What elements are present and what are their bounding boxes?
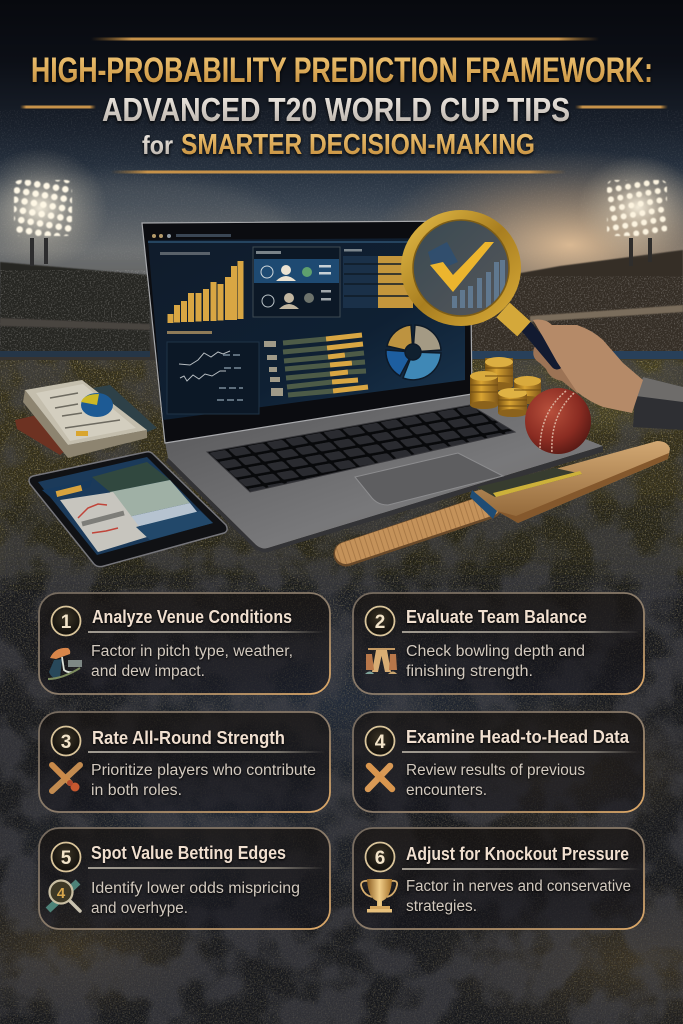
floodlight left [0, 148, 108, 268]
heading: Adjust for Knockout Pressure [406, 844, 629, 864]
number badge 6: 6 [375, 848, 385, 869]
number badge 5 [52, 842, 80, 872]
number badge 6 [366, 842, 394, 872]
icon: balance scale with cricket kit [365, 648, 397, 674]
trackpad [355, 453, 503, 505]
number badge 4 [366, 726, 394, 756]
description: Check bowling depth and [406, 643, 585, 660]
title block: for [142, 130, 173, 160]
number badge 1 [52, 606, 80, 636]
stadium stands: right [470, 250, 683, 359]
description: strategies. [406, 898, 477, 915]
bar chart [168, 261, 244, 323]
icon: trophy [361, 879, 397, 912]
laptop screen lid [142, 221, 472, 443]
card 2: evaluate team balance [353, 593, 644, 694]
number badge 3 [52, 726, 80, 756]
icon: venue lamp and stadium [48, 648, 82, 679]
gold coin stacks [470, 357, 541, 417]
palm and thumb [533, 320, 643, 413]
stacked rows panel [343, 249, 413, 308]
magnifier head [401, 210, 521, 326]
line chart panel [167, 331, 259, 414]
horizontal bars panel [264, 335, 368, 396]
description: Factor in pitch type, weather, [91, 643, 293, 660]
magnifier handle [503, 310, 557, 363]
cricket ball [525, 388, 591, 454]
pie chart [386, 325, 441, 380]
books with report [15, 380, 157, 458]
heading: Spot Value Betting Edges [91, 843, 286, 863]
title block: SMARTER DECISION-MAKING [181, 129, 535, 161]
card 4: examine head-to-head data [353, 712, 644, 812]
curled fingers [533, 342, 578, 394]
stadium stands: left [0, 262, 150, 357]
description: in both roles. [91, 782, 182, 799]
heading: Evaluate Team Balance [406, 607, 587, 627]
number badge 4: 4 [375, 732, 386, 753]
number badge 3: 3 [61, 732, 71, 753]
number badge 2 [366, 606, 394, 636]
description: finishing strength. [406, 663, 533, 680]
icon: magnifier with number [48, 880, 80, 911]
card 1: analyze venue conditions [39, 593, 330, 694]
cricket bat [346, 441, 670, 554]
description: Prioritize players who contribute [91, 762, 316, 779]
laptop base [165, 394, 603, 549]
number badge 5: 5 [61, 848, 72, 869]
description: and overhype. [91, 900, 188, 917]
number badge 1: 1 [61, 612, 72, 633]
keyboard [207, 405, 515, 492]
card 5: spot value betting edges [39, 828, 330, 929]
title block [20, 38, 668, 174]
heading: Analyze Venue Conditions [92, 607, 292, 627]
heading: Rate All-Round Strength [92, 728, 285, 748]
checkmark [430, 242, 494, 292]
title block: ADVANCED T20 WORLD CUP TIPS [102, 91, 570, 128]
icon: crossed bats and ball [52, 765, 80, 792]
heading: Examine Head-to-Head Data [406, 727, 630, 747]
description: encounters. [406, 782, 487, 799]
description: Review results of previous [406, 762, 585, 779]
floodlight right [578, 155, 683, 266]
icon: crossed bats [368, 766, 392, 789]
description: and dew impact. [91, 663, 205, 680]
shirt sleeve [633, 377, 683, 430]
description: Identify lower odds mispricing [91, 880, 300, 897]
description: Factor in nerves and conservative [406, 878, 631, 895]
hand holding magnifier [401, 210, 683, 430]
dashboard display [148, 234, 465, 420]
icon: magnifier with number: 4 [57, 885, 66, 902]
card 6: adjust for knockout pressure [353, 828, 644, 929]
card 3: rate all-round strength [39, 712, 330, 812]
player comparison panel [253, 247, 340, 317]
tablet [29, 452, 227, 567]
number badge 2: 2 [375, 612, 385, 633]
laptop [142, 221, 603, 552]
